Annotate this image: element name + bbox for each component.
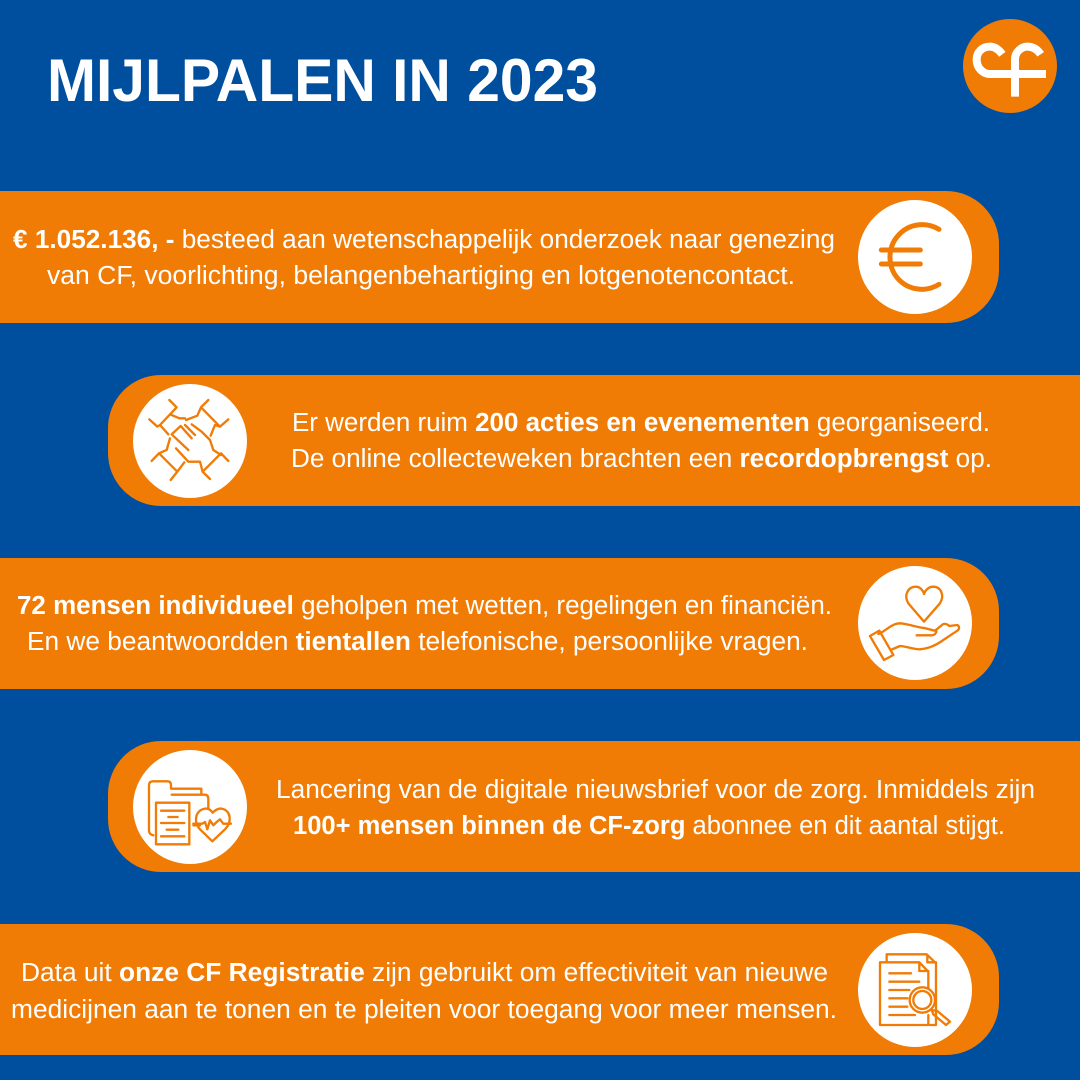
text: newsletter: Lancering van de digitale nieuwsbrief voor de zorg. Inmiddels zijn [276, 776, 1035, 804]
icon: euro [858, 200, 972, 314]
panel: registry [0, 924, 999, 1055]
text: funding [13, 226, 835, 290]
title: MIJLPALEN IN 2023 [47, 47, 598, 114]
text: funding: € 1.052.136, - besteed aan wetenschappelijk onderzoek naar genezing [13, 226, 835, 254]
icon: document with magnifier [858, 933, 972, 1047]
text: individual help: En we beantwoordden tientallen telefonische, persoonlijke vragen. [27, 628, 808, 656]
panel: newsletter [108, 741, 1080, 872]
panel: individual help [0, 558, 999, 689]
text: newsletter [276, 776, 1035, 840]
icon: joined hands [133, 384, 247, 498]
text: individual help [17, 592, 832, 656]
text: funding: van CF, voorlichting, belangenbehartiging en lotgenotencontact. [47, 262, 795, 290]
icon: medical folder [133, 750, 247, 864]
text: actions: Er werden ruim 200 acties en evenementen georganiseerd. [292, 409, 990, 437]
text: registry: Data uit onze CF Registratie zijn gebruikt om effectiviteit van nieuwe [21, 959, 828, 987]
text: newsletter: 100+ mensen binnen de CF-zorg abonnee en dit aantal stijgt. [293, 812, 1005, 840]
panel: actions [108, 375, 1080, 506]
panel: funding [0, 191, 999, 323]
text: individual help: 72 mensen individueel geholpen met wetten, regelingen en financiën. [17, 592, 832, 620]
text: actions [291, 409, 992, 473]
icon: CF logo [963, 19, 1057, 113]
text: registry [11, 959, 837, 1024]
text: registry: medicijnen aan te tonen en te pleiten voor toegang voor meer mensen. [11, 996, 837, 1024]
text: actions: De online collecteweken brachten een recordopbrengst op. [291, 445, 992, 473]
icon: heart in hand [858, 566, 972, 680]
